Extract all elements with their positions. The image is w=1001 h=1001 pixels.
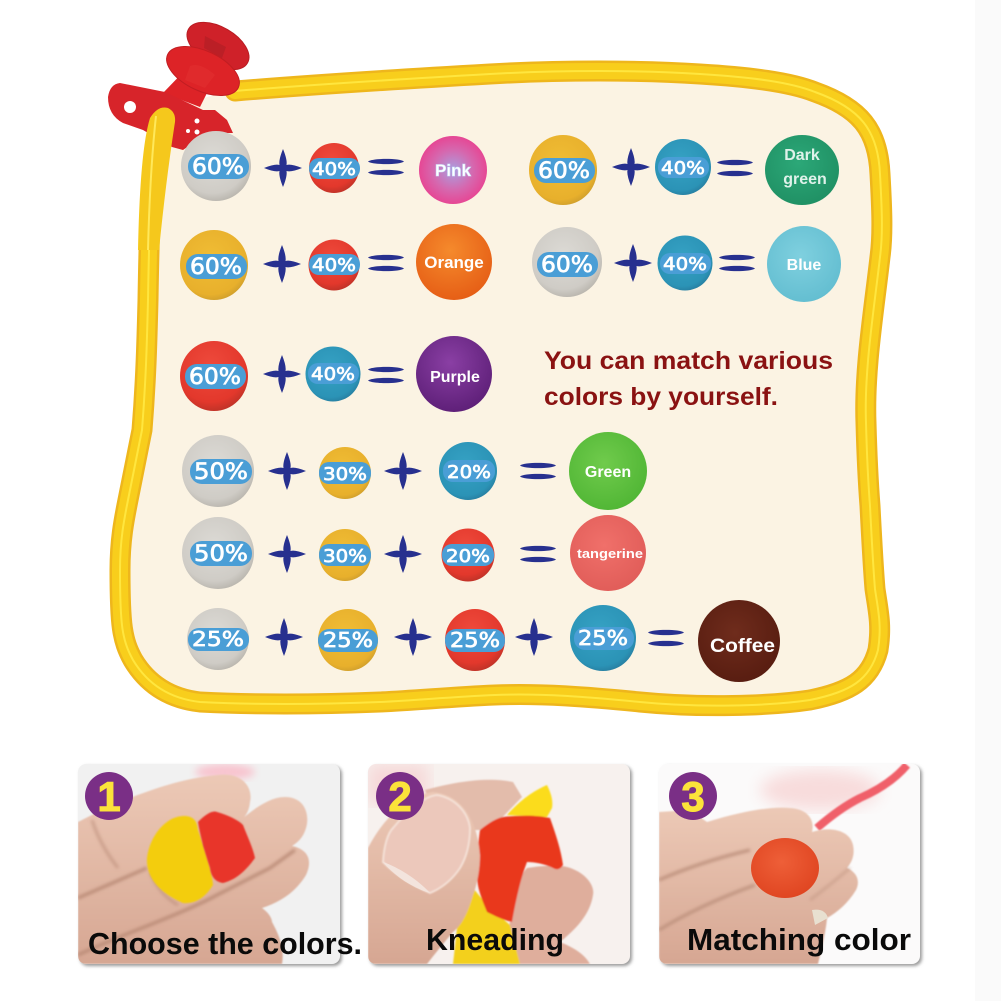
photo: thumb kneading clay [368, 764, 630, 964]
ball: grey 25% [187, 608, 249, 670]
ball: dark green: green [783, 171, 827, 188]
ball: grey 50% [182, 517, 254, 589]
caption: kneading: Kneading [426, 922, 564, 957]
ball: red 20%: 20% [446, 546, 490, 567]
equals [520, 546, 556, 562]
plus [263, 245, 301, 283]
ball: coffee: Coffee [710, 636, 775, 657]
equation: coffee [187, 600, 780, 682]
equation: tangerine [182, 515, 646, 591]
ball: teal 25%: 25% [578, 626, 628, 650]
equals [368, 367, 404, 383]
ball: dark green [765, 135, 839, 205]
ball: teal 40% [658, 236, 712, 290]
icon: red clay press clip [108, 13, 257, 150]
plus [263, 355, 301, 393]
caption: choose the colors: Choose the colors. [88, 926, 362, 961]
plus [384, 535, 422, 573]
ball: teal 40%: 40% [663, 254, 707, 275]
ball: red 20% [442, 528, 494, 582]
ball: grey 60%: 60% [541, 253, 593, 278]
panel: colour mixing board [108, 13, 882, 706]
badge: 2: 2 [388, 773, 412, 820]
ball: pink: Pink [435, 161, 471, 180]
equals [717, 160, 753, 176]
plus [384, 452, 422, 490]
ball: yellow 30%: 30% [323, 464, 367, 485]
ball: teal 20%: 20% [447, 462, 491, 483]
ball: yellow 30%: 30% [323, 546, 367, 567]
plus [264, 149, 302, 187]
equals [368, 159, 404, 175]
ball: purple: Purple [430, 369, 480, 386]
ball: pink [419, 136, 487, 204]
ball: grey 50%: 50% [194, 460, 248, 485]
equation: green [182, 432, 647, 510]
ball: yellow 30% [319, 529, 371, 581]
equals [368, 255, 404, 271]
panel: step 2 kneading [368, 764, 632, 966]
ball: coffee [698, 600, 780, 682]
ball: green [569, 432, 647, 510]
equals [719, 255, 755, 271]
equals [520, 463, 556, 479]
ball: yellow 30% [319, 447, 371, 499]
ball: blue [767, 226, 841, 302]
plus [515, 618, 553, 656]
text block: second line: colors by yourself. [544, 383, 778, 411]
ball: yellow 60% [180, 230, 248, 300]
ball: teal 20% [439, 442, 497, 500]
ball: yellow 25%: 25% [323, 628, 373, 652]
ball: grey 60%: 60% [192, 155, 244, 180]
panel: step 3 matching color [659, 764, 922, 966]
panel: step 1 choose the colors [78, 764, 362, 966]
ball: red 25% [445, 609, 505, 671]
ball: red 60%: 60% [189, 365, 241, 390]
badge: 2 [376, 772, 424, 820]
text block: match various colors: You can match various [544, 347, 833, 375]
ball: tangerine [570, 515, 646, 591]
plus [265, 618, 303, 656]
ball: yellow 25% [318, 609, 378, 671]
equation: orange [180, 224, 492, 300]
equation: purple [180, 336, 492, 412]
equation: dark green [529, 135, 839, 205]
yellow clay end over the clip [138, 107, 175, 250]
badge: 3 [669, 772, 717, 820]
ball: grey 50% [182, 435, 254, 507]
ball: red 25%: 25% [450, 628, 500, 652]
badge: 3: 3 [681, 773, 705, 820]
board background and yellow clay frame [120, 71, 882, 706]
ball: blue: Blue [787, 257, 821, 274]
ball: dark green: Dark [784, 147, 820, 164]
ball: purple [416, 336, 492, 412]
plus [268, 535, 306, 573]
plus [394, 618, 432, 656]
ball: grey 60% [532, 227, 602, 297]
ball: red 60% [180, 341, 248, 411]
ball: red 40% [309, 143, 360, 193]
ball: red 40% [308, 240, 360, 290]
ball: teal 25% [570, 605, 636, 671]
ball: orange: Orange [424, 253, 484, 272]
ball: grey 50%: 50% [194, 542, 248, 567]
badge: 1: 1 [97, 773, 121, 820]
equation: pink [181, 131, 487, 204]
plus [614, 244, 652, 282]
right margin strip [975, 0, 1001, 1001]
badge: 1 [85, 772, 133, 820]
photo: finished clay ball in hand [659, 764, 920, 964]
equation: blue [532, 226, 841, 302]
ball: green: Green [585, 464, 631, 481]
photo: hand with yellow and red clay [78, 764, 340, 964]
ball: grey 60% [181, 131, 251, 201]
ball: teal 40% [655, 139, 711, 195]
ball: teal 40%: 40% [661, 158, 705, 179]
ball: yellow 60%: 60% [190, 255, 242, 280]
ball: teal 40% [306, 346, 360, 402]
ball: teal 40%: 40% [311, 364, 355, 385]
plus [268, 452, 306, 490]
equals [648, 630, 684, 646]
ball: yellow 60%: 60% [538, 159, 590, 184]
ball: tangerine: tangerine [577, 547, 643, 561]
ball: red 40%: 40% [312, 159, 356, 180]
plus [612, 148, 650, 186]
ball: orange [416, 224, 492, 300]
caption: matching color: Matching color [687, 922, 911, 957]
ball: red 40%: 40% [312, 255, 356, 276]
ball: yellow 60% [529, 135, 597, 205]
ball: grey 25%: 25% [192, 627, 244, 651]
